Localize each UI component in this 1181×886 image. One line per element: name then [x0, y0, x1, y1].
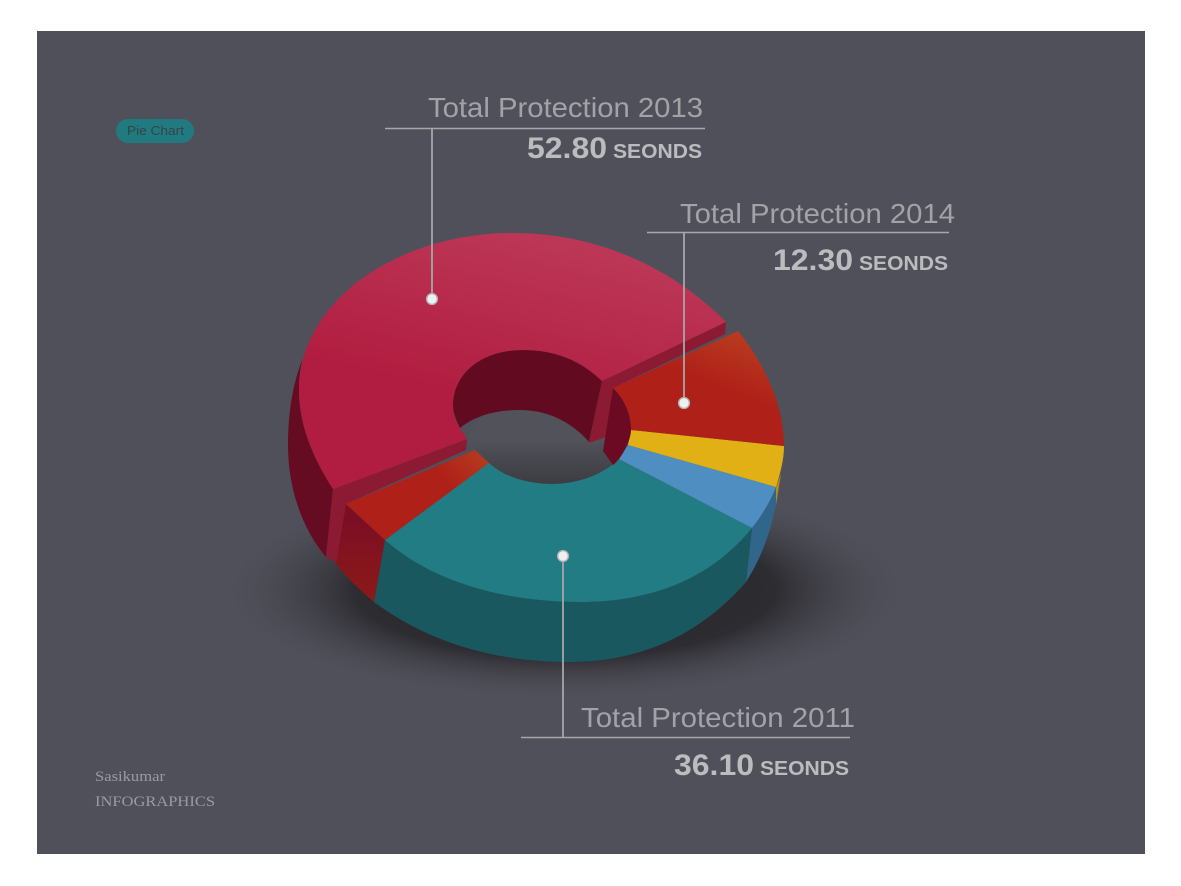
crimson slice outer side	[288, 358, 333, 557]
callout: 2013: 52.80	[527, 132, 607, 165]
callout: 2011	[521, 551, 855, 782]
callout: 2014	[647, 198, 955, 408]
callout: 2013: SEONDS	[613, 141, 702, 163]
blue slice side	[746, 487, 776, 582]
small red slice top	[346, 450, 489, 540]
blue slice top	[619, 445, 776, 528]
callout: 2011: 36.10	[674, 749, 754, 782]
callout: 2014: 12.30	[773, 244, 853, 277]
footer credit	[95, 769, 215, 810]
teal slice side	[374, 528, 752, 662]
inner wall of crimson slice	[453, 350, 602, 442]
donut hole floor	[467, 380, 632, 484]
teal slice top: Total Protection 2011	[385, 459, 752, 602]
callout: 2014: SEONDS	[859, 253, 948, 275]
3D donut pie chart	[288, 233, 784, 662]
callout: 2013	[385, 92, 705, 304]
callout: 2013: Total Protection 2013	[428, 92, 703, 123]
footer credit: INFOGRAPHICS	[95, 794, 215, 810]
pill label: Pie Chart	[127, 123, 184, 138]
callout: 2011: Total Protection 2011	[581, 702, 855, 733]
footer credit: Sasikumar	[95, 769, 165, 785]
crimson slice top: Total Protection 2013	[299, 233, 726, 489]
small red slice side	[336, 504, 385, 602]
pill label	[116, 119, 194, 143]
callout: 2011: SEONDS	[760, 758, 849, 780]
crimson slice right cut face	[589, 322, 726, 443]
callout: 2014: Total Protection 2014	[680, 198, 955, 229]
yellow slice top	[628, 430, 784, 487]
red slice inner wall	[603, 388, 631, 465]
yellow slice side	[776, 474, 781, 505]
crimson slice left cut face	[326, 439, 467, 563]
red slice top: Total Protection 2014	[613, 331, 784, 446]
chart shadow	[215, 478, 915, 702]
